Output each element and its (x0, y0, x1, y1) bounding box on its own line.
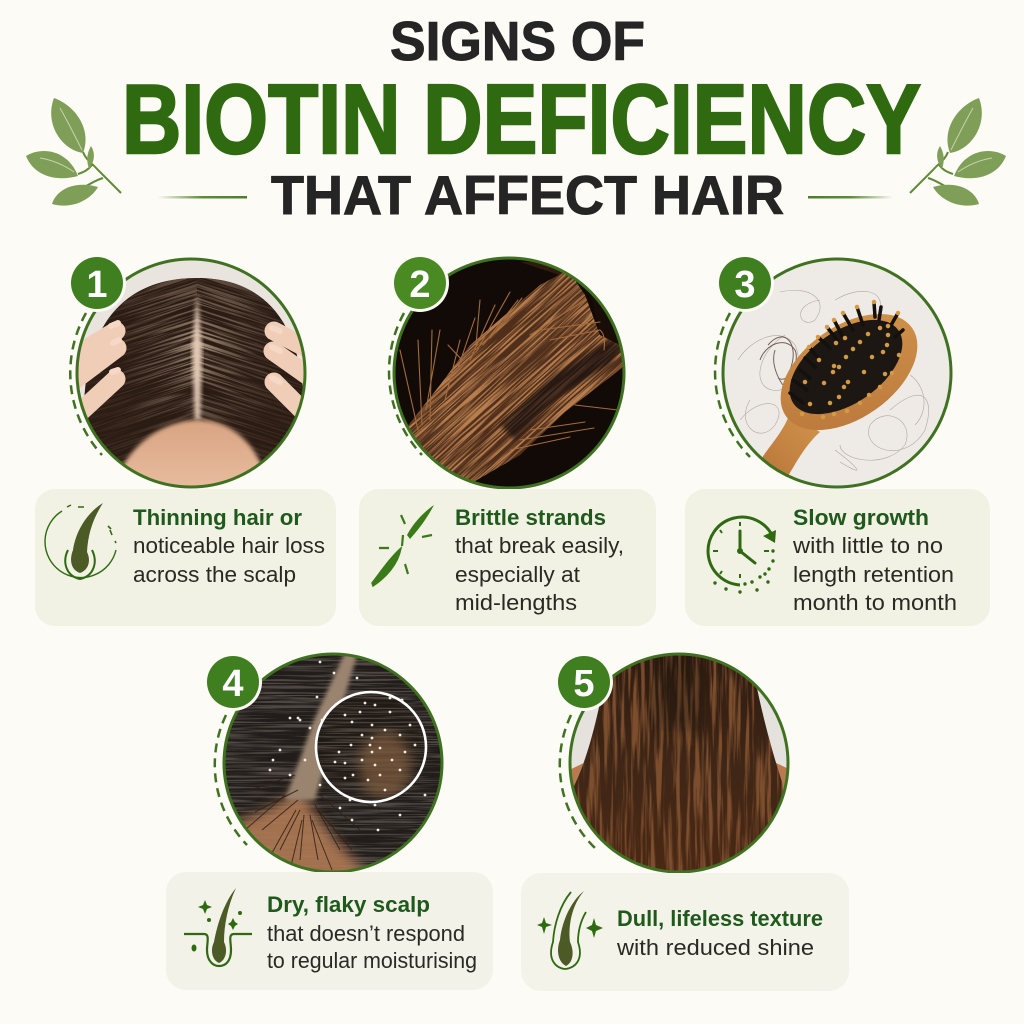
badge 1: 1 (86, 264, 108, 306)
panel: card 1 (35, 489, 336, 626)
badge 3: 3 (734, 264, 756, 306)
text: card 4: that doesn’t respond (267, 921, 465, 946)
text: card 3: with little to no (792, 533, 943, 558)
text: card 1: Thinning hair or (133, 505, 302, 530)
photo: dull frizzy hair (572, 656, 786, 870)
text: card 3: month to month (793, 590, 957, 615)
badge 3 (716, 254, 774, 312)
icon: left leaf sprig (26, 98, 121, 206)
icon: clock with arrow (708, 517, 776, 592)
panel: sign 3 slow growth brush (715, 250, 960, 495)
text: card 2: mid-lengths (455, 590, 577, 615)
badge 4: 4 (222, 663, 244, 705)
ring (224, 654, 442, 872)
panel: card 3 (685, 489, 990, 626)
icon: flaky follicle (184, 888, 252, 966)
text: card 2: Brittle strands (455, 505, 606, 530)
ring (570, 654, 788, 872)
text: card 3: Slow growth (793, 505, 929, 530)
ring (77, 259, 305, 487)
icon: thinning follicle (45, 503, 116, 579)
text: card 4: Dry, flaky scalp (267, 892, 430, 917)
photo: frayed strands (396, 260, 622, 486)
panel: sign 5 dull hair (555, 650, 795, 880)
dashed arc (715, 313, 750, 457)
text: card 2 (455, 505, 624, 615)
text: card 3: length retention (793, 562, 954, 587)
panel: card 4 (166, 872, 493, 990)
title line: signs of: SIGNS OF (390, 10, 645, 72)
photo: flaky scalp (226, 656, 440, 870)
divider line left (158, 196, 247, 198)
ring (394, 258, 624, 488)
dashed arc (560, 715, 595, 848)
text: card 2: especially at (455, 562, 580, 587)
text: card 4: to regular moisturising (267, 948, 477, 973)
text: card 1 (133, 505, 325, 587)
text: card 5 (616, 906, 823, 960)
text: card 5: Dull, lifeless texture (617, 906, 823, 931)
text: card 4 (267, 892, 477, 973)
text: card 1: across the scalp (133, 562, 296, 587)
panel: sign 4 flaky scalp (204, 650, 446, 880)
text: card 3 (792, 505, 957, 615)
badge 4 (204, 653, 262, 711)
photo: thinning scalp (78, 260, 304, 486)
badge 2 (391, 254, 449, 312)
panel: card 2 (359, 489, 656, 626)
badge 1 (68, 254, 126, 312)
title (122, 10, 921, 226)
badge 5 (555, 653, 613, 711)
panel: card 5 (521, 873, 849, 991)
icon: dull hair strand (537, 891, 603, 969)
text: card 2: that break easily, (455, 533, 624, 558)
badge 2: 2 (409, 264, 431, 306)
ring (723, 259, 951, 487)
title line: that affect hair: THAT AFFECT HAIR (271, 164, 784, 226)
icon: broken strand (372, 505, 434, 586)
text: card 1: noticeable hair loss (133, 533, 325, 558)
panel: sign 1 thinning hair (69, 257, 306, 488)
panel: sign 2 brittle strands (388, 256, 626, 489)
photo: hairbrush with shed hair (724, 260, 950, 486)
dashed arc (389, 313, 422, 455)
dashed arc (70, 313, 102, 455)
text: card 5: with reduced shine (616, 935, 814, 960)
divider line right (808, 196, 893, 198)
icon: right leaf sprig (910, 98, 1006, 206)
badge 5: 5 (573, 663, 595, 705)
dashed arc (215, 715, 247, 845)
